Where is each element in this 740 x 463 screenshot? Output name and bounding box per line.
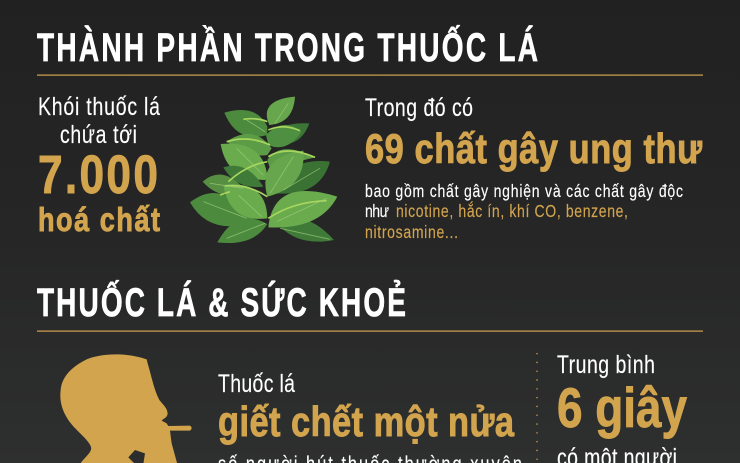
text block: 7.000 chemicals: hoá chất — [38, 203, 160, 239]
heading: thuốc lá & sức khoẻ: THUỐC LÁ & SỨC KHOẺ — [37, 279, 406, 325]
text block: 69 carcinogens — [365, 94, 702, 242]
text block: kills half of smokers — [218, 370, 522, 463]
icon: smoker silhouette — [60, 354, 192, 463]
text block: 69 carcinogens: 69 chất gây ung thư — [365, 126, 702, 173]
text block: every 6 seconds: 6 giây — [557, 377, 687, 439]
text block: every 6 seconds: Trung bình — [557, 351, 655, 379]
icon: tobacco plant — [190, 97, 337, 243]
text block: 69 carcinogens: bao gồm chất gây nghiện và các chất gây độc — [365, 181, 683, 201]
text block: 7.000 chemicals: chứa tới — [60, 121, 137, 149]
text block: kills half of smokers: giết chết một nửa — [218, 399, 515, 446]
text block: kills half of smokers: Thuốc lá — [218, 370, 295, 398]
text block: 7.000 chemicals: 7.000 — [38, 145, 158, 205]
text block: 7.000 chemicals: Khói thuốc lá — [38, 93, 160, 121]
text block: 69 carcinogens: nicotine, hắc ín, khí CO, benzene, — [396, 200, 628, 221]
text block: 7.000 chemicals — [38, 93, 160, 239]
text block: 69 carcinogens: như — [365, 201, 389, 221]
dotted divider — [536, 353, 538, 463]
text block: 69 carcinogens: Trong đó có — [365, 94, 473, 122]
heading: thành phần trong thuốc lá: THÀNH PHẦN TRONG THUỐC LÁ — [37, 24, 538, 70]
text block: every 6 seconds — [557, 351, 687, 463]
text block: 69 carcinogens: nitrosamine... — [365, 222, 458, 242]
